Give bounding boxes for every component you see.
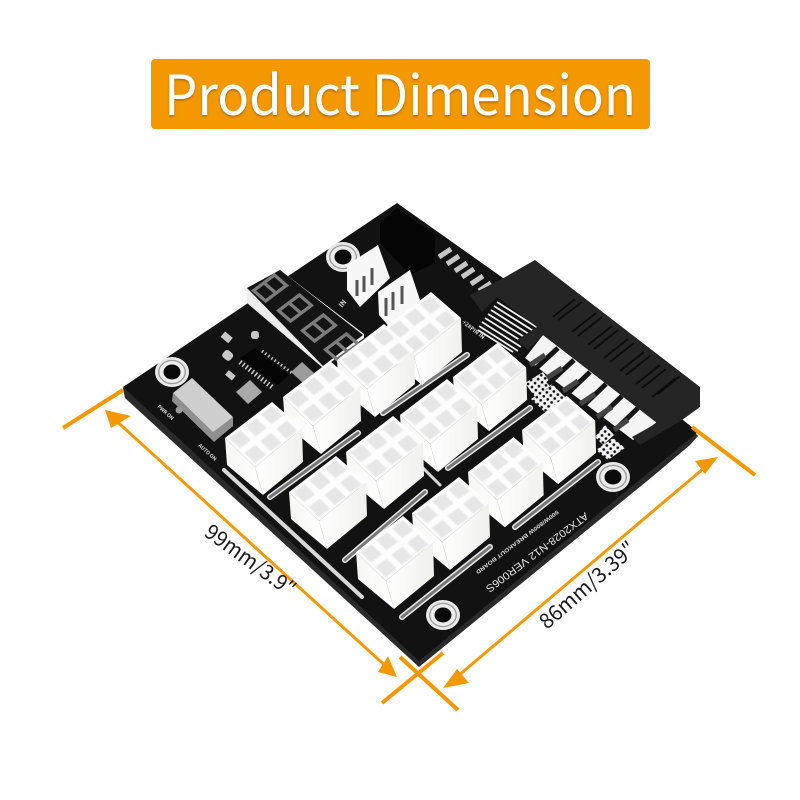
board underside edge	[123, 300, 698, 667]
control chip	[240, 348, 292, 387]
6-pin connector front row 1	[356, 516, 434, 609]
mounting hole left	[155, 357, 189, 387]
label PWR ON: PWR ON	[156, 403, 175, 422]
board description text: 500W/800W BREAKOUT BOARD	[474, 508, 559, 575]
white connector slots with black pins	[525, 335, 657, 440]
small SMD parts	[221, 331, 314, 404]
seven segment display	[247, 270, 363, 366]
6-pin connector front row 2	[412, 477, 490, 570]
striped solder pins	[478, 302, 538, 352]
mounting hole right	[596, 462, 630, 492]
extension line bottom	[400, 657, 458, 710]
6-pin connector middle row 1	[289, 456, 367, 549]
6-pin connector back row 1	[225, 402, 303, 495]
black relay	[380, 208, 435, 275]
6-pin connector back row 3	[337, 324, 415, 417]
white pin connector 1	[347, 245, 390, 307]
dimension label: 99mm/3.9″	[199, 516, 302, 603]
extension line right	[692, 427, 755, 475]
6-pin connector back row 4	[384, 292, 462, 385]
dimension arrow	[443, 457, 718, 688]
6-pin connector back row 2	[283, 361, 361, 454]
solder pad dots	[525, 372, 625, 460]
mounting hole top	[326, 242, 360, 272]
6-pin connector middle row 4	[453, 343, 527, 431]
mounting hole bottom	[426, 600, 460, 630]
extension line left	[63, 390, 123, 428]
circuit board	[123, 203, 700, 667]
6-pin connector middle row 3	[400, 379, 478, 472]
connector ridges	[553, 299, 680, 397]
dimension: depth 86mm	[400, 427, 755, 710]
banner background	[151, 59, 650, 129]
label 24+28PIN IN: +28PIN IN	[461, 318, 487, 341]
label IN: IN	[337, 298, 349, 310]
display side	[247, 270, 364, 368]
label AUTO ON: AUTO ON	[196, 442, 218, 463]
title banner	[151, 51, 650, 131]
title text: Product Dimension	[164, 51, 636, 131]
dimension: width 99mm	[63, 390, 443, 703]
dimension arrow	[105, 410, 397, 677]
board top surface	[123, 203, 698, 661]
6-pin connector middle row 2	[346, 416, 424, 509]
board name text: ATX2028-N12 VER006S	[483, 510, 590, 594]
24-pin black connector	[470, 260, 700, 445]
metal slots	[270, 355, 598, 617]
silver traces	[224, 468, 440, 597]
pad strips near relay	[439, 249, 491, 291]
white pin connector 2	[378, 270, 420, 330]
6-pin connector front row 3	[468, 437, 544, 527]
power switch	[172, 378, 233, 443]
extension line bottom	[382, 653, 443, 703]
6-pin connector front row 4	[522, 396, 596, 484]
dimension label: 86mm/3.39″	[532, 534, 642, 635]
